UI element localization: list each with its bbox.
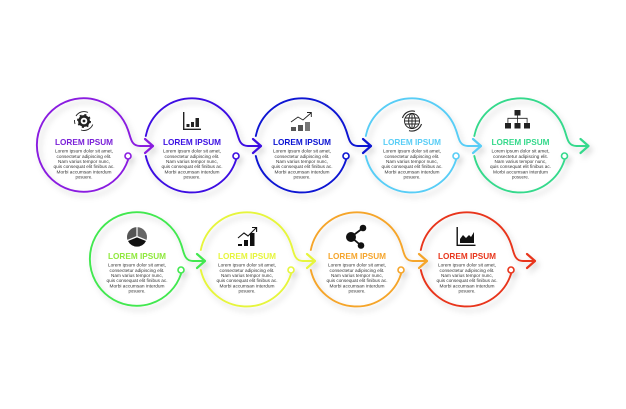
body lines: Lorem ipsum dolor sit amet, [108,263,166,268]
body lines: quis consequat elit finibus ac. [107,278,167,283]
body lines: Lorem ipsum dolor sit amet, [383,149,441,154]
body lines: posuere. [512,175,529,180]
body lines: posuere. [403,175,421,180]
step 8 panel [311,212,427,306]
body lines: Nam varius tempor nunc, [58,159,110,164]
body lines: posuere. [458,289,476,294]
body lines: quis consequat elit finibus ac. [437,278,497,283]
heading: LOREM IPSUM [328,251,386,261]
heading: LOREM IPSUM [492,137,550,147]
icon: growth coins [291,112,311,131]
body lines [54,149,114,180]
body lines: Lorem ipsum dolor sit amet, [55,149,113,154]
body lines: posuere. [348,289,366,294]
body lines [106,263,168,294]
icon: pie chart [127,227,147,247]
body lines [216,263,278,294]
ring and arrow [256,98,371,192]
body lines: Nam varius tempor nunc, [331,273,383,278]
heading: LOREM IPSUM [438,251,496,261]
body lines: posuere. [293,175,311,180]
body lines [272,149,332,180]
body lines [490,149,551,180]
body lines [382,149,442,180]
ring and arrow [146,98,261,192]
body lines: consectetur adipiscing elit. [220,268,274,273]
ring and arrow [366,98,481,192]
body lines: consectetur adipiscing elit. [110,268,164,273]
body lines: consectetur adipiscing elit. [274,154,330,159]
body lines [162,149,222,180]
body lines: Nam varius tempor nunc, [221,273,273,278]
heading: LOREM IPSUM [55,137,113,147]
heading: LOREM IPSUM [108,251,166,261]
heading: LOREM IPSUM [163,137,221,147]
body lines: quis consequat elit finibus ac. [272,164,332,169]
body lines: Morbi accumsan interdum [493,169,548,174]
body lines: consectetur adipiscing elit. [440,268,494,273]
icon: org chart [505,110,530,128]
icon: globe with arrows [402,111,422,131]
body lines: quis consequat elit finibus ac. [162,164,222,169]
ring and arrow [311,212,427,306]
step 6 panel [90,212,205,306]
heading: LOREM IPSUM [273,137,331,147]
body lines: Nam varius tempor nunc, [111,273,163,278]
body lines: Lorem ipsum dolor sit amet, [438,263,496,268]
body lines: Morbi accumsan interdum [164,169,220,174]
body lines: consectetur adipiscing elit. [384,154,440,159]
body lines: consectetur adipiscing elit. [164,154,220,159]
body lines: Morbi accumsan interdum [56,169,112,174]
step 4 panel [366,98,481,192]
ring and arrow [37,98,153,192]
body lines: Lorem ipsum dolor sit amet, [328,263,386,268]
body lines: Nam varius tempor nunc, [386,159,438,164]
body lines: consectetur adipiscing elit. [56,154,112,159]
ring and arrow [474,98,588,192]
body lines [326,263,388,294]
body lines: Lorem ipsum dolor sit amet, [273,149,331,154]
step 9 panel [421,212,535,306]
body lines: Lorem ipsum dolor sit amet, [163,149,221,154]
ring and arrow [421,212,535,306]
body lines: quis consequat elit finibus ac. [54,164,114,169]
step 7 panel [201,212,315,306]
body lines: quis consequat elit finibus ac. [490,164,551,169]
body lines: quis consequat elit finibus ac. [327,278,387,283]
body lines: Nam varius tempor nunc, [495,159,546,164]
body lines: posuere. [238,289,256,294]
step 2 panel [146,98,261,192]
step 3 panel [256,98,371,192]
body lines: consectetur adipiscing elit. [493,154,548,159]
ring and arrow [201,212,315,306]
icon: share nodes [346,225,366,249]
heading: LOREM IPSUM [383,137,441,147]
step 1 panel [37,98,153,192]
body lines: posuere. [75,175,93,180]
body lines: Morbi accumsan interdum [110,283,165,288]
icon: gear with arrows [75,112,93,130]
body lines: Lorem ipsum dolor sit amet, [218,263,276,268]
step 5 panel [474,98,588,192]
ring and arrow [90,212,205,306]
body lines: Morbi accumsan interdum [274,169,330,174]
body lines: quis consequat elit finibus ac. [382,164,442,169]
body lines: Morbi accumsan interdum [220,283,275,288]
heading: LOREM IPSUM [218,251,276,261]
body lines: Morbi accumsan interdum [440,283,495,288]
body lines: consectetur adipiscing elit. [330,268,384,273]
body lines: Morbi accumsan interdum [384,169,440,174]
icon: growth bars [238,228,257,246]
body lines [436,263,498,294]
body lines: Morbi accumsan interdum [330,283,385,288]
body lines: Lorem ipsum dolor sit amet, [491,149,550,154]
body lines: quis consequat elit finibus ac. [217,278,277,283]
icon: bar chart [183,112,201,130]
body lines: Nam varius tempor nunc, [276,159,328,164]
body lines: Nam varius tempor nunc, [441,273,493,278]
body lines: posuere. [183,175,201,180]
body lines: Nam varius tempor nunc, [166,159,218,164]
body lines: posuere. [128,289,146,294]
icon: area chart [456,227,476,246]
